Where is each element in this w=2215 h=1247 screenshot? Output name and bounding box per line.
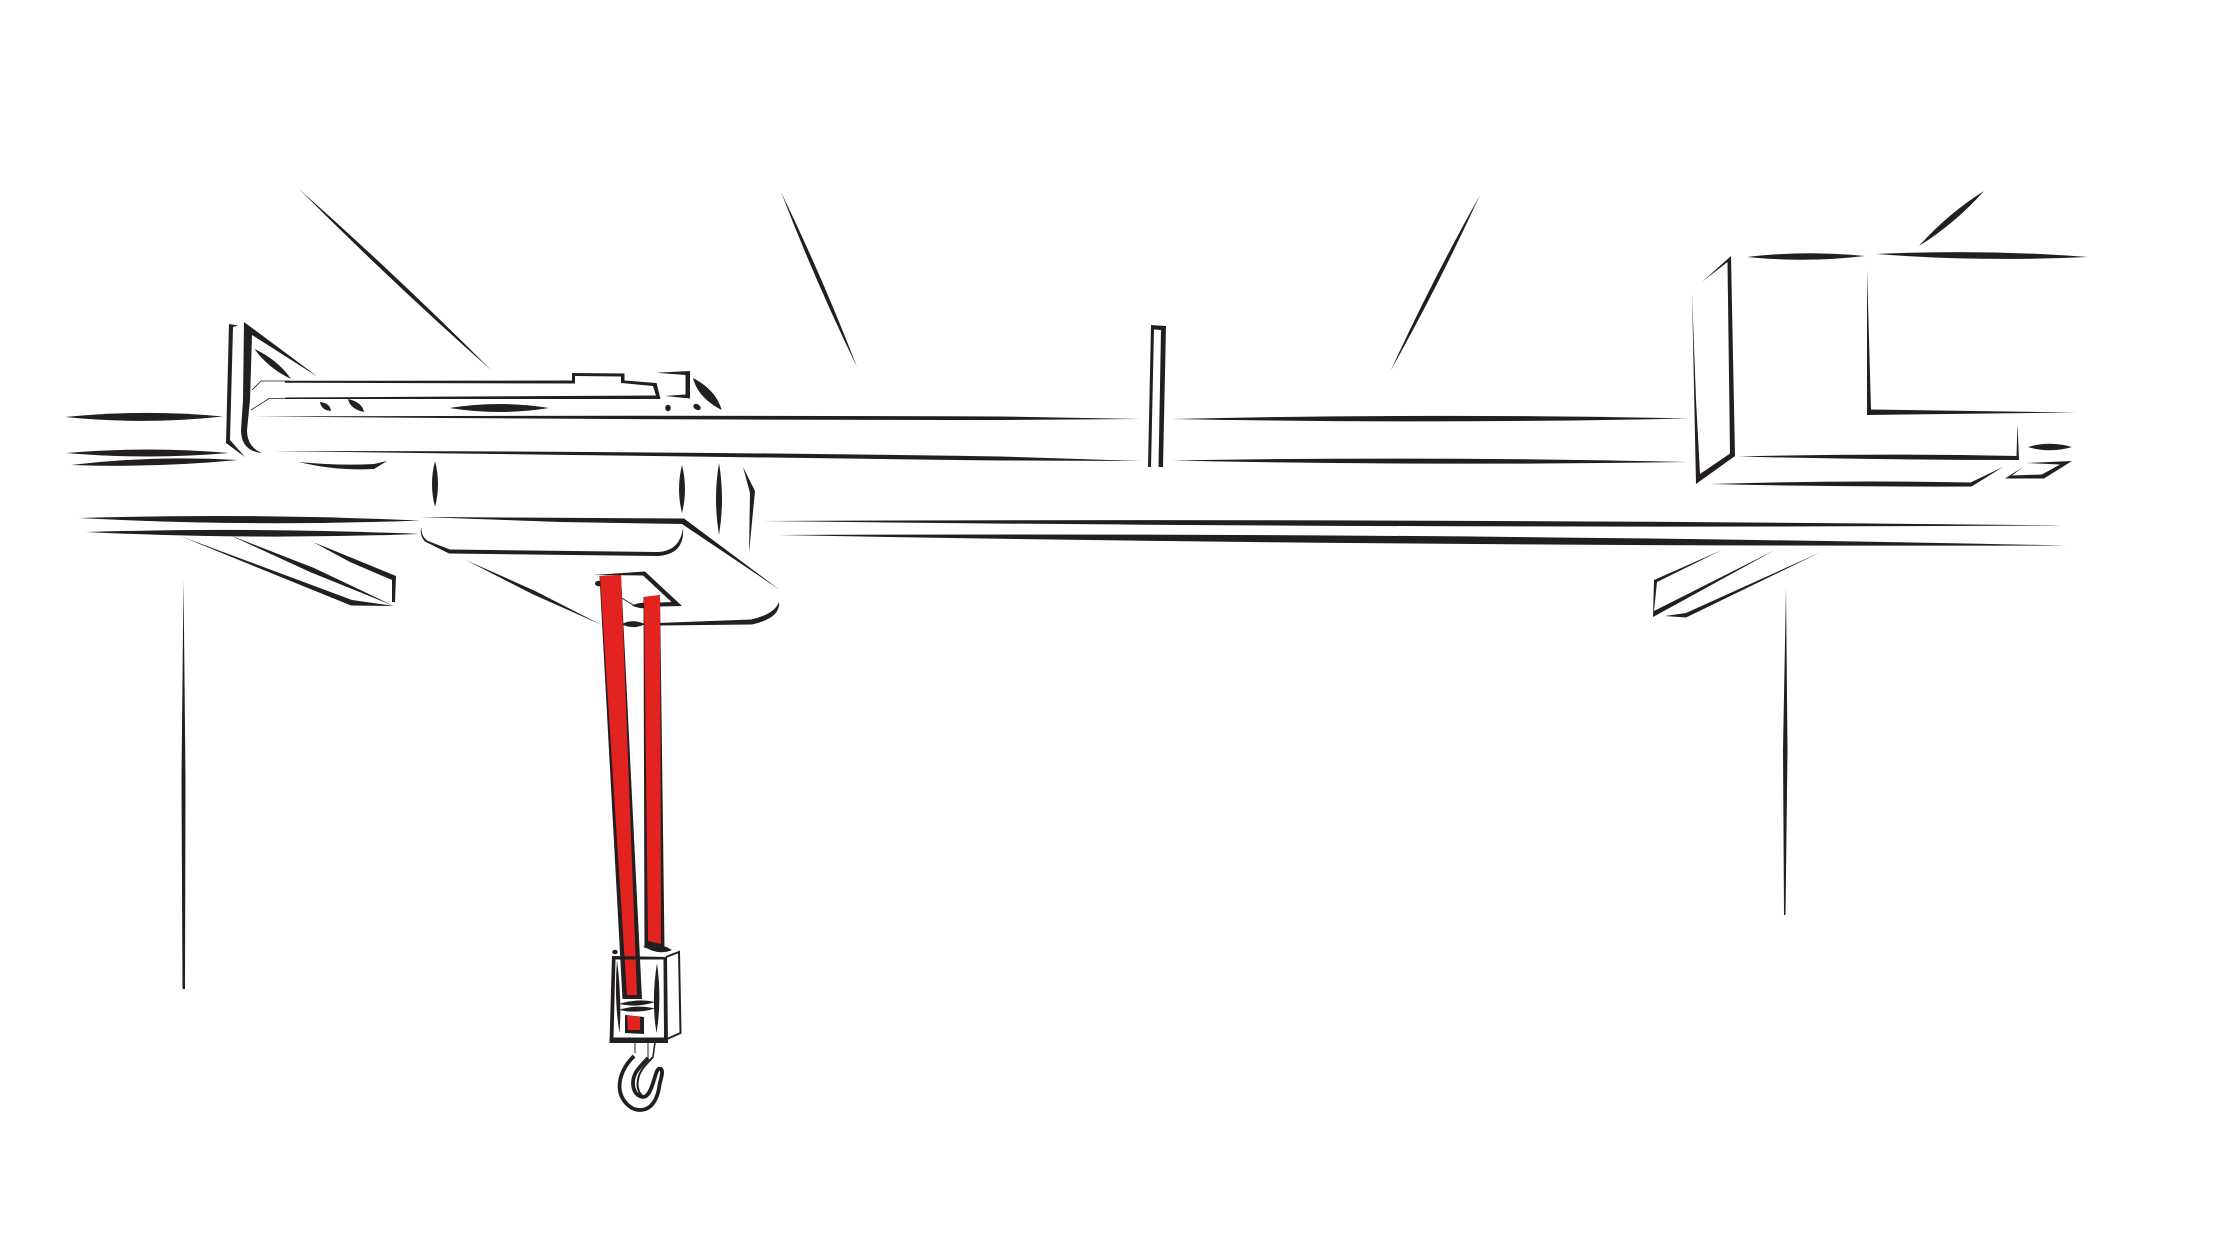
main bridge beam (253, 416, 1688, 464)
hook (620, 1042, 662, 1110)
beam stiffener post (1148, 325, 1166, 467)
trolley rail (251, 371, 722, 412)
trolley hatch (593, 572, 682, 608)
support columns (182, 579, 1788, 989)
right end carriage (1692, 252, 2088, 487)
left beam stubs (65, 413, 387, 469)
right diagonal braces (1653, 550, 1821, 618)
hook block (610, 950, 680, 1043)
roof diagonal lines (299, 189, 1984, 370)
cable lower segment (625, 1015, 644, 1034)
left diagonal braces (180, 535, 396, 606)
trolley vertical strokes (432, 461, 755, 553)
left end bracket (226, 322, 318, 457)
lower rail beam (79, 516, 2066, 546)
trolley body (420, 517, 780, 627)
hoist cables (600, 575, 672, 999)
